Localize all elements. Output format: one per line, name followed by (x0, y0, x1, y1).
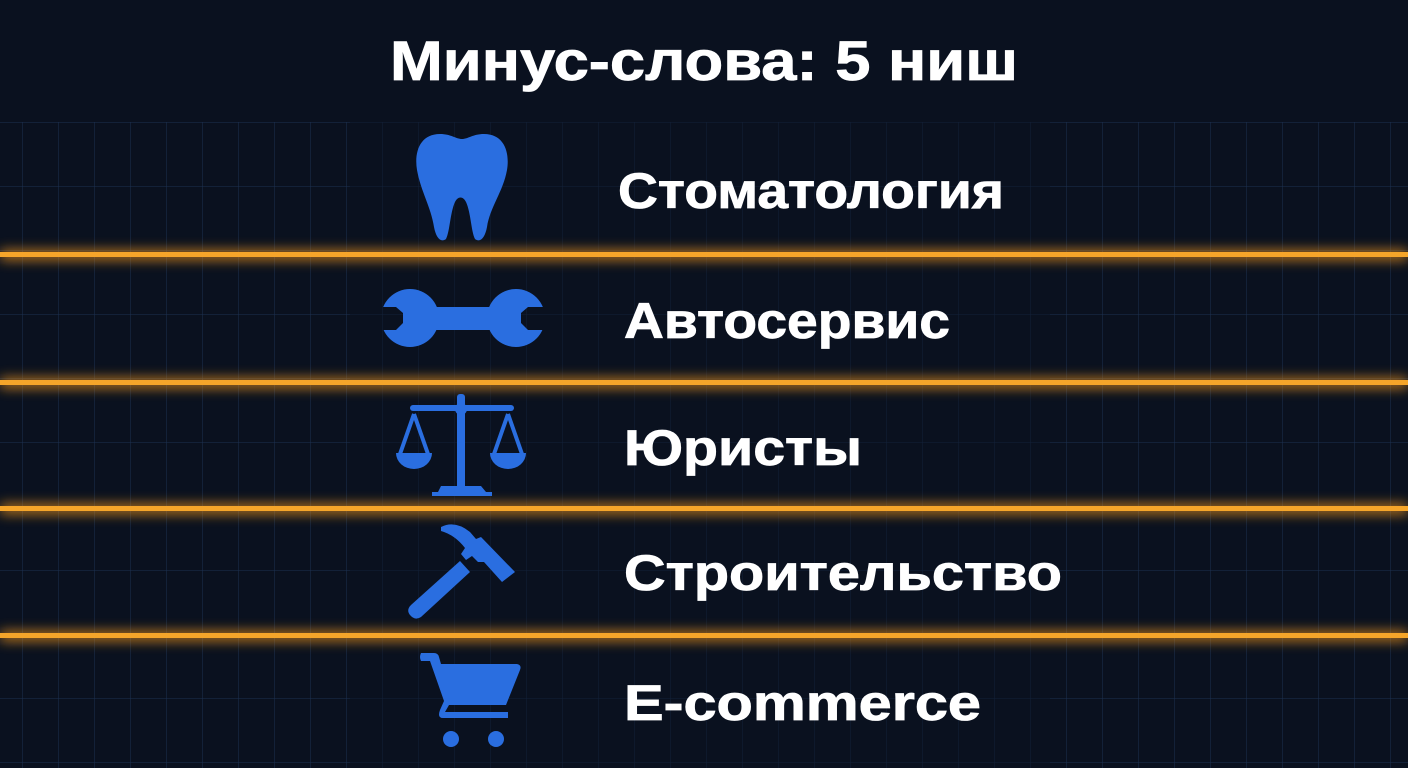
icon: hammer (408, 524, 515, 619)
title: Минус-слова: 5 ниш (390, 29, 1018, 92)
icon: wrench (381, 289, 545, 347)
label: Строительство: Строительство (624, 545, 1062, 601)
icon: scales (396, 394, 526, 496)
icon: tooth (416, 134, 508, 240)
orange glowing dividers (0, 250, 1408, 641)
label: Юристы: Юристы (624, 420, 862, 476)
icon: cart (420, 653, 521, 747)
label: Автосервис: Автосервис (624, 293, 950, 349)
label: E-commerce: E-commerce (624, 675, 981, 731)
label: Стоматология: Стоматология (618, 163, 1004, 219)
